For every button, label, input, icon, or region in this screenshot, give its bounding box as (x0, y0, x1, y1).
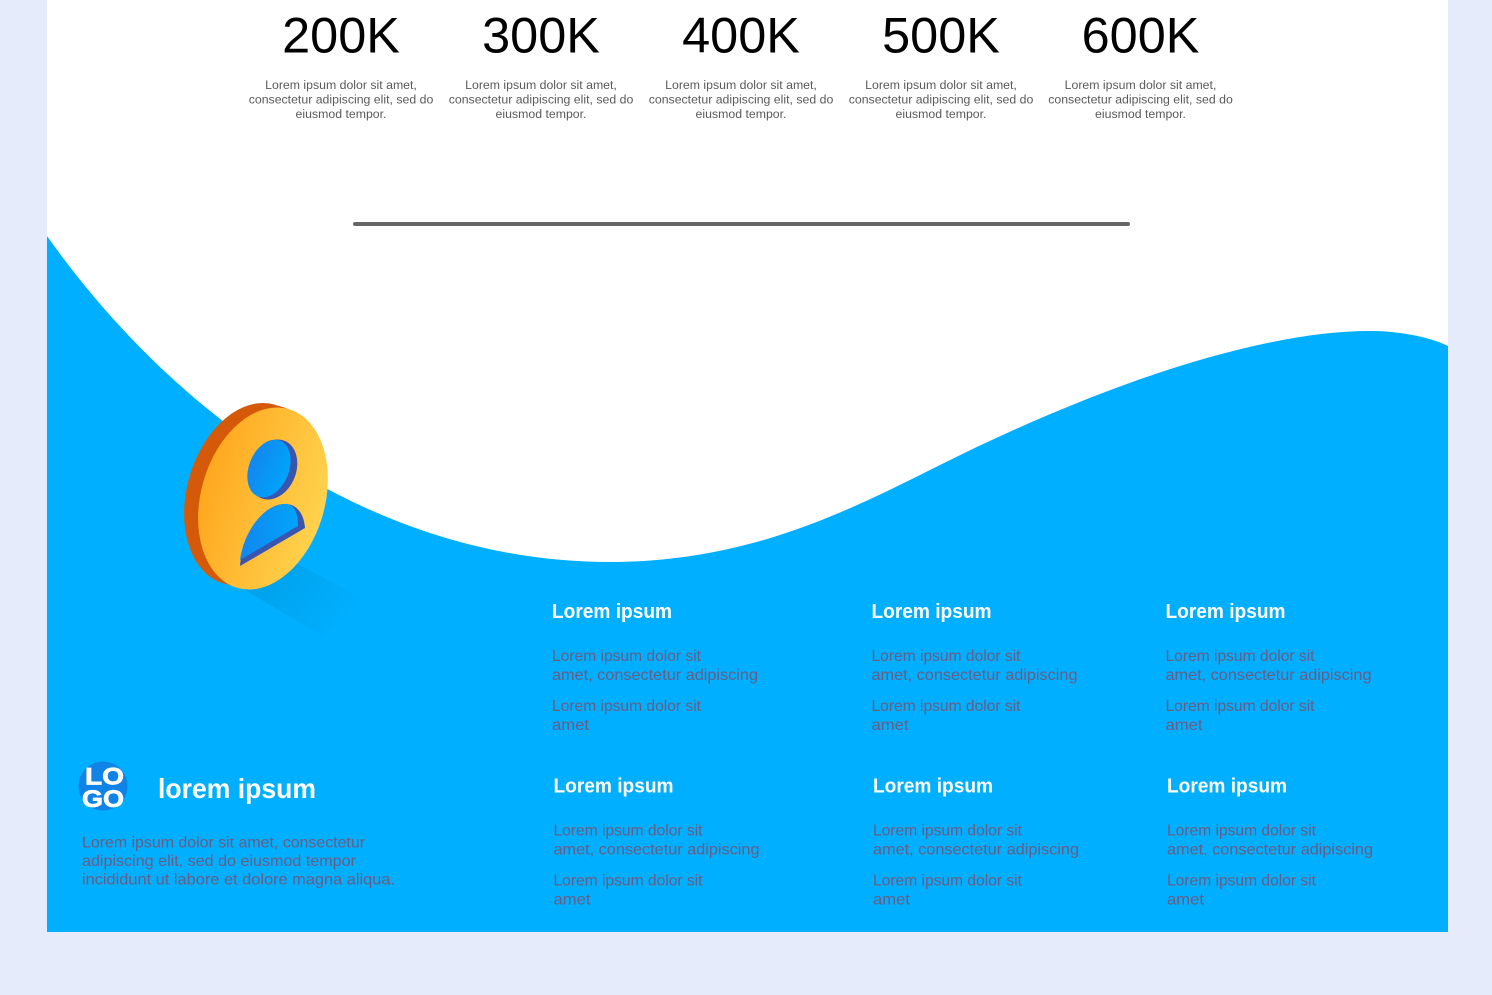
info block: row 2 column 2: Lorem ipsum dolor sit (873, 822, 1023, 840)
stat: 200K: consectetur adipiscing elit, sed do (249, 92, 433, 106)
info block: row 1 column 3 (1166, 601, 1372, 734)
info block: row 1 column 2: Lorem ipsum dolor sit (872, 648, 1021, 665)
info block: row 2 column 2: amet (873, 892, 911, 908)
stat: 400K: eiusmod tempor. (696, 107, 786, 121)
info block: row 2 column 3: amet (1167, 892, 1205, 908)
info block: row 1 column 2 (872, 601, 1078, 734)
info block: row 2 column 2 (873, 776, 1079, 908)
info block: row 1 column 2: Lorem ipsum (872, 601, 992, 623)
stat: 200K: Lorem ipsum dolor sit amet, (265, 78, 417, 92)
info block: row 2 column 1: Lorem ipsum dolor sit (554, 872, 703, 890)
brand description: incididunt ut labore et dolore magna aliqua. (82, 872, 395, 888)
stat: 500K: eiusmod tempor. (896, 107, 986, 121)
info block: row 1 column 1: amet, consectetur adipiscing (552, 667, 758, 684)
stat: 200K (249, 6, 433, 121)
info block: row 2 column 3: Lorem ipsum dolor sit (1167, 822, 1317, 840)
info block: row 1 column 1 (552, 601, 758, 734)
logo: LO (85, 764, 124, 790)
info block: row 1 column 2: Lorem ipsum dolor sit (872, 698, 1021, 715)
info block: row 2 column 2: amet, consectetur adipiscing (873, 842, 1079, 858)
stat: 300K (449, 6, 633, 121)
stat: 400K: consectetur adipiscing elit, sed do (649, 92, 833, 106)
brand description (82, 834, 395, 888)
stat: 600K (1048, 6, 1233, 121)
info block: row 1 column 3: amet, consectetur adipiscing (1166, 667, 1372, 684)
brand description: adipiscing elit, sed do eiusmod tempor (82, 853, 357, 870)
info block: row 1 column 1: Lorem ipsum dolor sit (552, 648, 702, 665)
info block: row 2 column 1 (554, 776, 760, 908)
stat: 300K: eiusmod tempor. (496, 107, 586, 121)
info block: row 2 column 1: Lorem ipsum (554, 776, 674, 798)
brand name: lorem ipsum (158, 773, 316, 804)
stat: 200K: 200K (282, 6, 400, 64)
stat: 300K: Lorem ipsum dolor sit amet, (465, 78, 617, 92)
logo (78, 762, 128, 813)
stat: 300K: 300K (482, 6, 600, 64)
info block: row 1 column 2: amet, consectetur adipiscing (872, 667, 1078, 684)
stat: 600K: Lorem ipsum dolor sit amet, (1065, 78, 1216, 92)
info block: row 2 column 1: Lorem ipsum dolor sit (554, 822, 703, 840)
axis line (353, 222, 1130, 226)
blue wave background (47, 236, 1448, 932)
info block: row 2 column 3: Lorem ipsum dolor sit (1167, 872, 1317, 890)
info block: row 2 column 3 (1167, 776, 1373, 908)
stat: 400K: 400K (682, 6, 800, 64)
info block: row 2 column 3: Lorem ipsum (1167, 776, 1287, 798)
stat: 400K (649, 6, 833, 121)
info block: row 1 column 2: amet (872, 717, 909, 734)
stat: 500K: consectetur adipiscing elit, sed do (849, 92, 1033, 106)
info block: row 1 column 3: Lorem ipsum (1166, 601, 1286, 623)
stat: 600K: 600K (1082, 6, 1200, 64)
stat: 400K: Lorem ipsum dolor sit amet, (665, 78, 817, 92)
info block: row 2 column 1: amet (554, 892, 591, 908)
stat: 300K: consectetur adipiscing elit, sed do (449, 92, 633, 106)
icon: user coin (164, 388, 365, 636)
info block: row 1 column 3: amet (1166, 717, 1203, 734)
info block: row 1 column 1: amet (552, 717, 590, 734)
info block: row 1 column 1: Lorem ipsum (552, 601, 672, 623)
stat: 500K: 500K (882, 6, 1000, 64)
info block: row 1 column 3: Lorem ipsum dolor sit (1166, 648, 1315, 665)
info block: row 2 column 2: Lorem ipsum (873, 776, 993, 798)
stat: 200K: eiusmod tempor. (296, 107, 386, 121)
info block: row 1 column 1: Lorem ipsum dolor sit (552, 698, 702, 715)
stat: 500K: Lorem ipsum dolor sit amet, (865, 78, 1017, 92)
logo: GO (82, 786, 124, 813)
brand description: Lorem ipsum dolor sit amet, consectetur (82, 834, 366, 852)
info block: row 1 column 3: Lorem ipsum dolor sit (1166, 698, 1315, 715)
info block: row 2 column 2: Lorem ipsum dolor sit (873, 872, 1023, 890)
stat: 600K: consectetur adipiscing elit, sed do (1048, 92, 1233, 106)
stat: 500K (849, 6, 1033, 121)
info block: row 2 column 1: amet, consectetur adipiscing (554, 842, 760, 858)
info block: row 2 column 3: amet, consectetur adipiscing (1167, 842, 1373, 858)
stat: 600K: eiusmod tempor. (1095, 107, 1186, 121)
